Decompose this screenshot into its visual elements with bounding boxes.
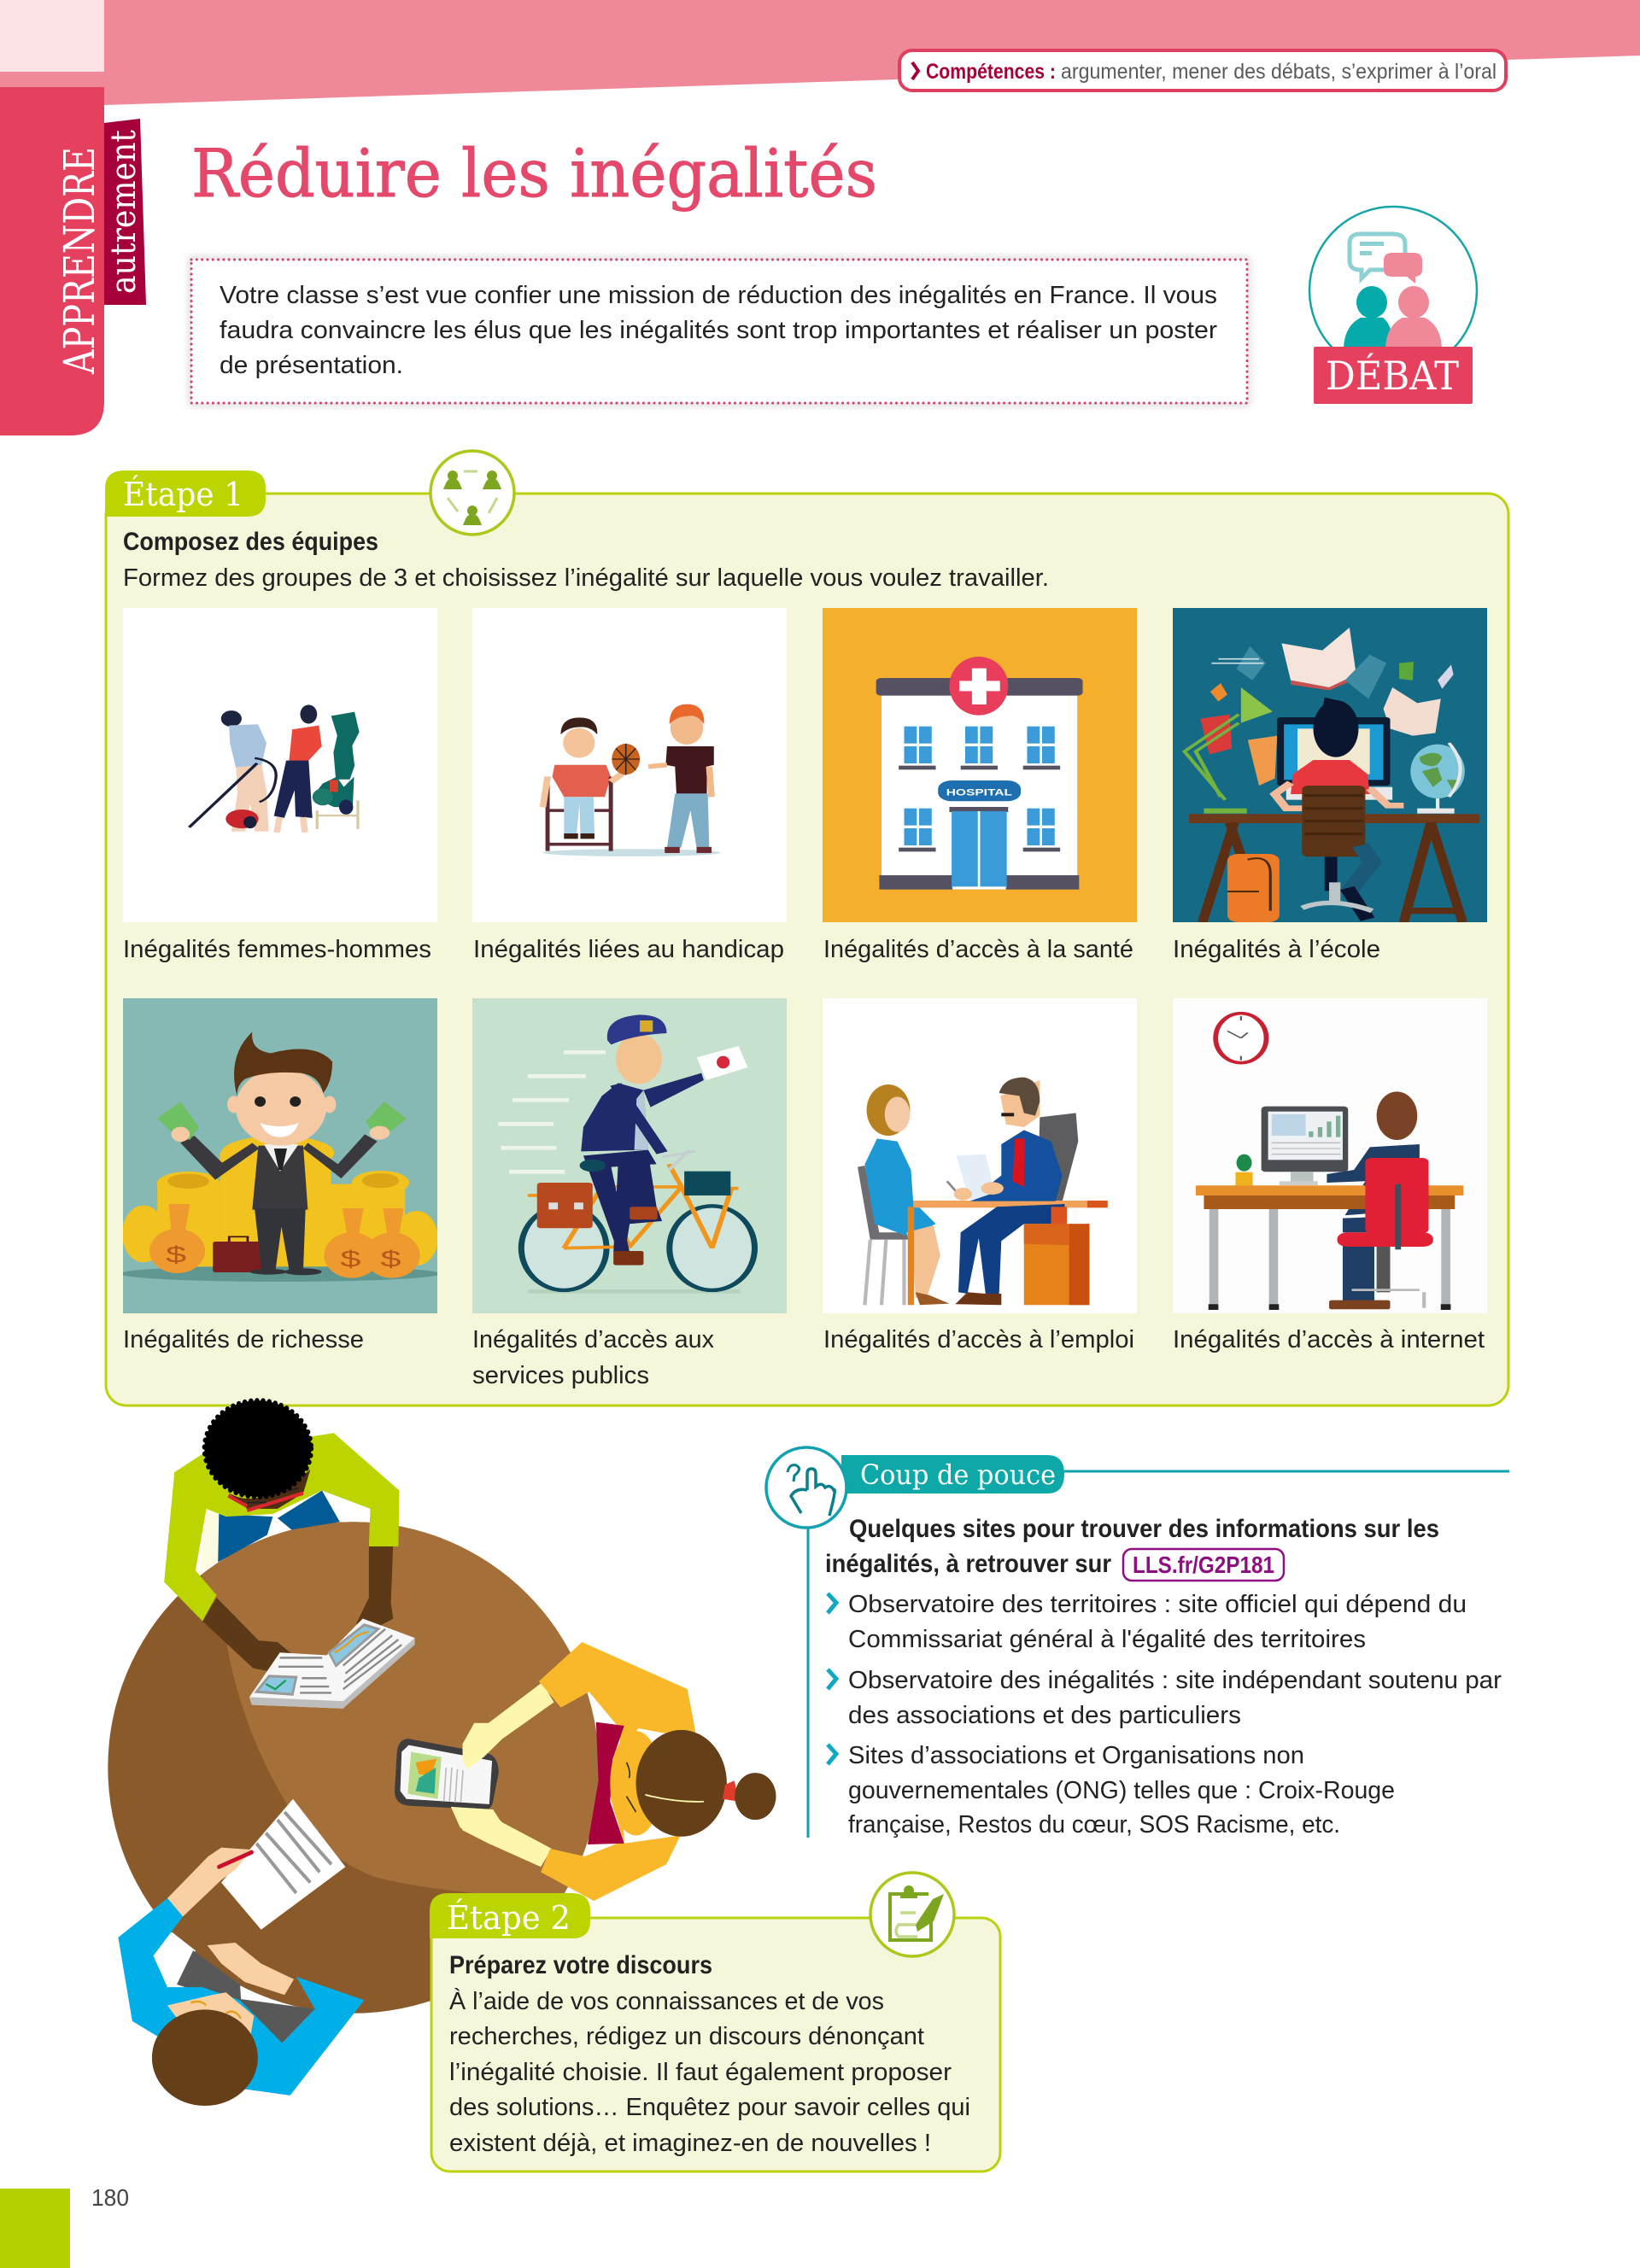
- caption: Inégalités femmes-hommes: [123, 936, 431, 963]
- image: santé: HOSPITAL: [946, 787, 1012, 798]
- page footer marker: [0, 2189, 70, 2268]
- text: sites: Commissariat général à l'égalité des territoires: [848, 1626, 1366, 1653]
- image: emploi: [823, 998, 1137, 1313]
- intro box: [191, 260, 1247, 403]
- step text: des solutions… Enquêtez pour savoir celles qui: [449, 2094, 970, 2121]
- heading tab: étape 2: [430, 1893, 590, 1938]
- icon: débat: DÉBAT: [1326, 352, 1459, 399]
- step text: Composez des équipes: [123, 528, 378, 556]
- tablet: [395, 1723, 505, 1844]
- competences pill: [899, 50, 1506, 91]
- image: handicap: [472, 608, 787, 922]
- person: bottom left: [118, 1799, 364, 2106]
- intro box: faudra convaincre les élus que les inégalités sont trop importantes et réaliser un poster: [220, 317, 1217, 344]
- competences pill: argumenter, mener des débats, s’exprimer à l’oral: [1061, 60, 1496, 84]
- step text: À l’aide de vos connaissances et de vos: [449, 1987, 884, 2015]
- icon: hand: [766, 1447, 846, 1528]
- text: sites: gouvernementales (ONG) telles que : Croix-Rouge: [848, 1777, 1395, 1804]
- step text: [449, 1951, 970, 2157]
- caption: Inégalités d’accès aux: [472, 1326, 714, 1353]
- caption: Inégalités à l’école: [1173, 936, 1380, 963]
- caption: Inégalités d’accès à internet: [1173, 1326, 1485, 1353]
- newspaper: [249, 1618, 415, 1709]
- image: internet: [1173, 998, 1487, 1313]
- text: sites: des associations et des particuliers: [848, 1702, 1241, 1729]
- side tab: apprendre autrement: [0, 87, 146, 435]
- image: richesse: $: [166, 1242, 186, 1267]
- text: sites: Observatoire des territoires : site officiel qui dépend du: [848, 1591, 1467, 1618]
- caption: Inégalités d’accès à l’emploi: [823, 1326, 1134, 1353]
- text: sites: [825, 1515, 1502, 1838]
- panel: coup de pouce: [766, 1447, 1509, 1838]
- caption: Inégalités d’accès à la santé: [823, 936, 1133, 963]
- text: sites: française, Restos du cœur, SOS Racisme, etc.: [848, 1811, 1340, 1838]
- header band: [0, 0, 1640, 105]
- person: right: [451, 1642, 776, 1901]
- panel: étape 1: [105, 451, 1508, 1406]
- side tab: apprendre autrement: APPRENDRE: [55, 147, 104, 375]
- image: richesse: $: [340, 1246, 360, 1271]
- caption: [472, 1326, 714, 1389]
- icon: débat: [1309, 207, 1477, 404]
- image: richesse: $: [381, 1246, 401, 1271]
- title: Réduire les inégalités: [191, 136, 877, 213]
- image: santé: [823, 608, 1137, 922]
- icon: équipes: [430, 451, 514, 535]
- image: richesse: [120, 998, 440, 1313]
- image: école: [1173, 608, 1487, 922]
- caption: Inégalités liées au handicap: [473, 936, 784, 963]
- step text: l’inégalité choisie. Il faut également proposer: [449, 2059, 952, 2086]
- icon: clipboard: [870, 1873, 954, 1956]
- step text: recherches, rédigez un discours dénonçant: [449, 2023, 924, 2050]
- competences pill: Compétences :: [926, 60, 1056, 84]
- heading tab: étape 1: [105, 471, 266, 517]
- step text: Formez des groupes de 3 et choisissez l’inégalité sur laquelle vous voulez travailler.: [123, 564, 1049, 592]
- text: sites: Quelques sites pour trouver des informations sur les: [849, 1515, 1439, 1543]
- link pill: LLS.fr/G2P181: [1133, 1552, 1274, 1578]
- text: sites: inégalités, à retrouver sur: [825, 1550, 1111, 1578]
- intro box: de présentation.: [220, 352, 403, 379]
- image: femmes-hommes: [123, 608, 437, 922]
- person: top: [164, 1400, 399, 1672]
- heading tab: étape 1: Étape 1: [123, 476, 243, 513]
- step text: existent déjà, et imaginez-en de nouvelles !: [449, 2130, 931, 2157]
- text: sites: Observatoire des inégalités : site indépendant soutenu par: [848, 1667, 1502, 1694]
- side tab: apprendre autrement: autrement: [104, 130, 144, 294]
- caption: Inégalités de richesse: [123, 1326, 364, 1353]
- step text: Préparez votre discours: [449, 1951, 712, 1979]
- step text: [123, 528, 1049, 592]
- heading tab: étape 2: Étape 2: [447, 1899, 571, 1937]
- table: [108, 1488, 600, 2014]
- illustration: students around table: [108, 1400, 776, 2106]
- panel: étape 2: [430, 1873, 1000, 2172]
- image: services publics: [472, 998, 787, 1313]
- caption: services publics: [472, 1362, 649, 1389]
- page number: 180: [91, 2184, 129, 2211]
- intro box: Votre classe s’est vue confier une mission de réduction des inégalités en France. Il vous: [220, 282, 1217, 309]
- heading tab: coup de pouce: Coup de pouce: [860, 1458, 1056, 1491]
- text: sites: Sites d’associations et Organisations non: [848, 1742, 1304, 1769]
